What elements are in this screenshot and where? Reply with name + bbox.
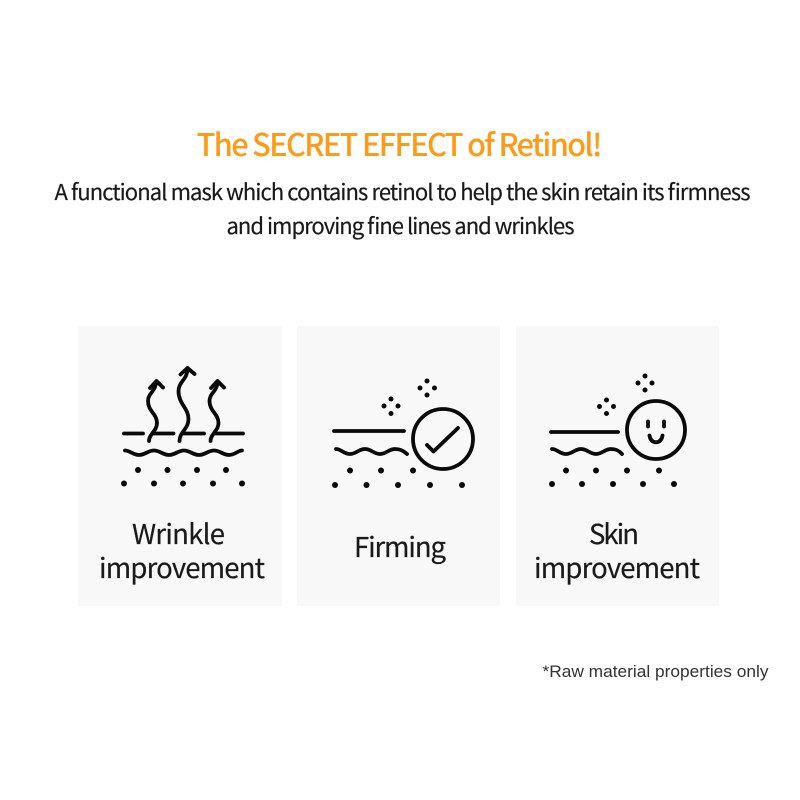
icon: skin layers with check mark (332, 378, 473, 488)
label: skin improvement (534, 512, 700, 586)
label: skin improvement: improvement (534, 546, 700, 586)
footnote: *Raw material properties only (542, 662, 769, 681)
subtitle: and improving fine lines and wrinkles (226, 209, 574, 241)
title: The SECRET EFFECT of Retinol! (196, 120, 602, 165)
icon: skin layers with rising arrows (121, 368, 245, 486)
panel: wrinkle improvement (78, 326, 282, 606)
label: wrinkle improvement: Wrinkle (132, 512, 225, 552)
label: wrinkle improvement (99, 512, 265, 586)
panel: skin improvement (516, 326, 719, 606)
subtitle (54, 175, 750, 241)
subtitle: A functional mask which contains retinol to help the skin retain its firmness (54, 175, 750, 207)
panel: firming (297, 326, 500, 606)
label: firming: Firming (354, 525, 446, 565)
label: wrinkle improvement: improvement (99, 546, 265, 586)
icon: skin layers with smiley (549, 374, 685, 487)
label: skin improvement: Skin (589, 512, 639, 552)
